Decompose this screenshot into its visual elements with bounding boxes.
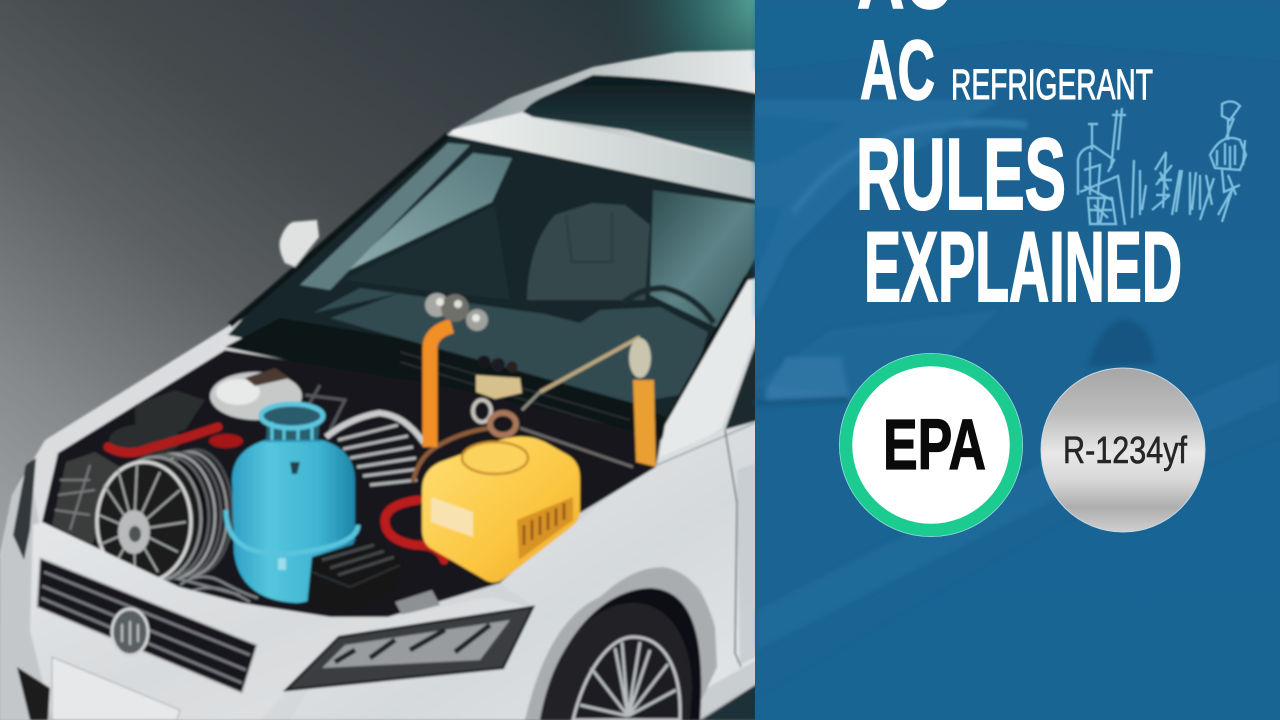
top gauge cluster <box>425 293 488 331</box>
grille <box>37 558 257 693</box>
A-pillar and fender <box>290 278 760 720</box>
panel: blue title panel <box>755 0 1280 720</box>
sunroof <box>523 75 760 164</box>
rope scribble <box>176 577 258 602</box>
front bumper <box>30 522 535 720</box>
blue refrigerant cylinder <box>226 404 358 603</box>
badge: EPA <box>839 353 1023 537</box>
title <box>856 0 1182 322</box>
seat <box>527 203 650 300</box>
far-side door panel <box>343 205 510 300</box>
yellow refrigerant jug <box>422 436 580 583</box>
small silver reservoir <box>210 368 302 420</box>
title line REFRIGERANT: REFRIGERANT <box>951 61 1153 109</box>
right gauge <box>629 338 651 378</box>
dashboard <box>313 288 708 403</box>
orange strap right <box>633 380 656 467</box>
car body <box>0 50 760 720</box>
icon: blueprint sketch of refrigerant equipment <box>1078 101 1246 225</box>
headlight <box>286 607 533 690</box>
illustration: silver car with open engine bay <box>0 50 760 720</box>
tan cord <box>540 337 640 392</box>
EPA label: EPA <box>883 406 986 485</box>
lower plate <box>52 657 180 720</box>
black electrical block <box>307 540 404 612</box>
left headlight sliver <box>13 458 36 560</box>
right red hose <box>385 500 444 560</box>
background gradient <box>0 0 760 720</box>
title line RULES: RULES <box>856 119 1066 231</box>
black pillars <box>230 135 448 325</box>
badge: R-1234yf <box>1041 368 1205 532</box>
belt pulley wheel <box>97 450 232 582</box>
steering wheel <box>623 288 714 323</box>
lower grille <box>17 667 50 720</box>
centre valve assembly <box>473 356 540 435</box>
braided hose <box>413 428 490 482</box>
second grey hose <box>520 428 633 467</box>
red fitting <box>209 434 243 448</box>
right glass <box>650 190 760 327</box>
engine bay <box>42 350 661 632</box>
faint car ghost <box>755 0 1280 720</box>
windshield and cabin <box>225 135 760 440</box>
silver turbine unit <box>326 413 424 513</box>
side mirror <box>280 220 319 267</box>
side window glass <box>343 153 512 273</box>
orange hose left <box>430 326 452 447</box>
cowl <box>225 318 672 440</box>
wheel arch band <box>525 567 717 720</box>
title line AC: AC <box>860 23 935 117</box>
emblem <box>112 609 148 655</box>
wheel <box>540 588 701 720</box>
R-1234yf label: R-1234yf <box>1063 430 1187 472</box>
left red hose <box>108 427 218 453</box>
